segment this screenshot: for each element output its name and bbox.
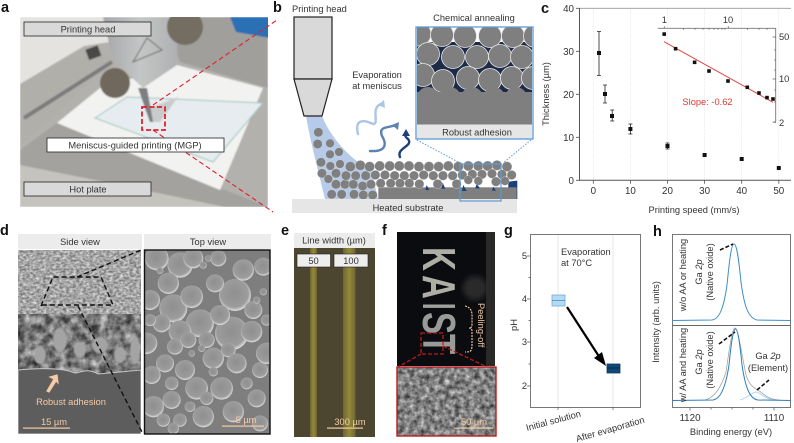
chart: pH: Initial solution: [525, 409, 582, 433]
text: robust adhesion: Robust adhesion: [36, 397, 106, 407]
KAIST sample photo: S: [413, 312, 463, 334]
chart: XPS spectra: Ga 2p: [694, 349, 704, 375]
chemical annealing heading: Chemical annealing: [433, 13, 515, 23]
SEM inset: [397, 367, 496, 436]
scale bar 15 um: 15 µm: [41, 417, 67, 427]
label: meniscus-guided printing: [47, 138, 224, 152]
chart: thickness versus printing speed: [541, 4, 791, 215]
scale bar 50 um: [454, 417, 493, 429]
printing head label: Printing head: [292, 4, 347, 14]
header: side view: Side view: [60, 237, 100, 247]
label: printing head: Printing head: [61, 24, 115, 34]
chart: thickness versus printing speed: 30: [699, 186, 711, 197]
panel label h: h: [653, 224, 662, 240]
label 50: [297, 254, 330, 267]
chart: thickness versus printing speed: 20: [662, 186, 673, 197]
chart: thickness versus printing speed: 40: [563, 4, 575, 15]
header: top view: [144, 234, 271, 249]
meniscus liquid: [306, 116, 378, 199]
panel label f: f: [382, 223, 387, 239]
chart: XPS spectra: (Native oxide): [705, 243, 715, 301]
small zoom box and dotted guides: [417, 140, 531, 201]
chart: pH: [509, 234, 646, 443]
chart: XPS spectra: [651, 234, 791, 437]
scale bar 300 um: 300 µm: [334, 417, 366, 427]
inset log-log chart: 50: [779, 32, 789, 42]
inset log-log chart: [658, 15, 789, 128]
chart: XPS spectra: w/ AA and heating: [678, 328, 688, 403]
chart: pH: pH: [509, 319, 519, 331]
SEM side view: [18, 250, 141, 434]
SEM top view with particles: [144, 249, 271, 435]
evaporation label: at meniscus: [352, 81, 402, 91]
chart: thickness versus printing speed: 50: [773, 186, 785, 197]
scale bar 5 um: 5 µm: [236, 415, 257, 425]
chart: XPS spectra: Intensity (arb. units): [651, 281, 661, 363]
inset log-log chart: Slope: -0.62: [682, 97, 733, 107]
red zoom box and guide lines: [142, 20, 277, 212]
label 100: 100: [343, 256, 359, 266]
panel label b: b: [273, 0, 282, 16]
header: top view: Top view: [190, 237, 226, 247]
heated substrate: Heated substrate: [373, 203, 443, 213]
inset log-log chart: 10: [779, 74, 789, 84]
evaporation arrows: [357, 100, 410, 157]
chart: thickness versus printing speed: Printing speed (mm/s): [649, 205, 739, 215]
KAIST sample photo: [397, 232, 495, 366]
chart: XPS spectra: (Native oxide): [705, 331, 715, 389]
inset: chemical annealing: Robust adhesion: [442, 128, 512, 138]
red dashed zoom box: [398, 333, 487, 367]
label: meniscus-guided printing: Meniscus-guided printing (MGP): [68, 140, 202, 150]
evaporation label: Evaporation: [352, 70, 402, 80]
scale bar 300 um: [327, 417, 366, 429]
chart: XPS spectra: (Element): [748, 363, 788, 373]
optical micrograph of printed lines: [294, 248, 375, 437]
chart: thickness versus printing speed: Thickness (µm): [541, 62, 551, 126]
chart: thickness versus printing speed: 10: [625, 186, 636, 197]
chart: pH: 4: [522, 294, 527, 304]
chart: pH: 5: [522, 251, 527, 261]
inset log-log chart: 10: [723, 15, 733, 25]
KAIST sample photo: I: [413, 303, 465, 309]
scale bar 50 um: 50 µm: [461, 417, 487, 427]
icon: printing head nozzle: [294, 17, 332, 116]
scale bar 5 um: [222, 415, 264, 427]
panel label g: g: [504, 223, 513, 239]
chart: XPS spectra: Ga 2p: [755, 351, 781, 361]
label: printing head: [24, 22, 151, 36]
chart: thickness versus printing speed: 20: [563, 90, 575, 101]
chart: XPS spectra: w/o AA or heating: [678, 239, 688, 312]
panel label a: a: [1, 0, 10, 16]
chart: pH: 2: [522, 381, 527, 391]
panel label d: d: [0, 223, 9, 239]
heated substrate: [292, 199, 517, 213]
dashed zoom region: [41, 250, 143, 434]
inset log-log chart: 1: [662, 15, 667, 25]
chart: XPS spectra: 1120: [679, 413, 701, 424]
chart: pH: Evaporation: [561, 247, 611, 257]
chart: thickness versus printing speed: 40: [736, 186, 748, 197]
chart: thickness versus printing speed: 30: [563, 47, 575, 58]
arrow: robust adhesion: [47, 375, 58, 392]
panel label e: e: [281, 223, 289, 239]
chart: thickness versus printing speed: 0: [569, 176, 575, 187]
header: line width: [294, 233, 375, 248]
chart: pH: at 70°C: [561, 258, 592, 268]
header: line width: Line width (µm): [302, 236, 366, 246]
KAIST sample photo: T: [413, 334, 463, 355]
label 100: [334, 254, 368, 267]
chart: pH: 3: [522, 337, 527, 347]
particle film: [313, 128, 517, 200]
inset: chemical annealing: [415, 26, 534, 140]
KAIST sample photo: K: [413, 247, 463, 271]
peeling-off brace and label: [465, 303, 486, 352]
chart: XPS spectra: 1110: [764, 413, 785, 424]
chart: thickness versus printing speed: 10: [563, 133, 575, 144]
peeling-off brace and label: Peeling-off: [476, 303, 486, 348]
chart: XPS spectra: Ga 2p: [694, 259, 704, 285]
label 50: 50: [308, 256, 319, 266]
KAIST sample photo: A: [413, 275, 463, 299]
panel label c: c: [541, 1, 549, 17]
chart: XPS spectra: Binding energy (eV): [690, 427, 772, 437]
scale bar 15 um: [23, 417, 70, 429]
panel a: photo of printer: [20, 9, 270, 207]
chart: thickness versus printing speed: 0: [591, 186, 597, 197]
inset log-log chart: 2: [779, 118, 784, 128]
label: hot plate: [24, 182, 151, 196]
header: side view: [18, 234, 142, 249]
label: hot plate: Hot plate: [69, 184, 107, 194]
